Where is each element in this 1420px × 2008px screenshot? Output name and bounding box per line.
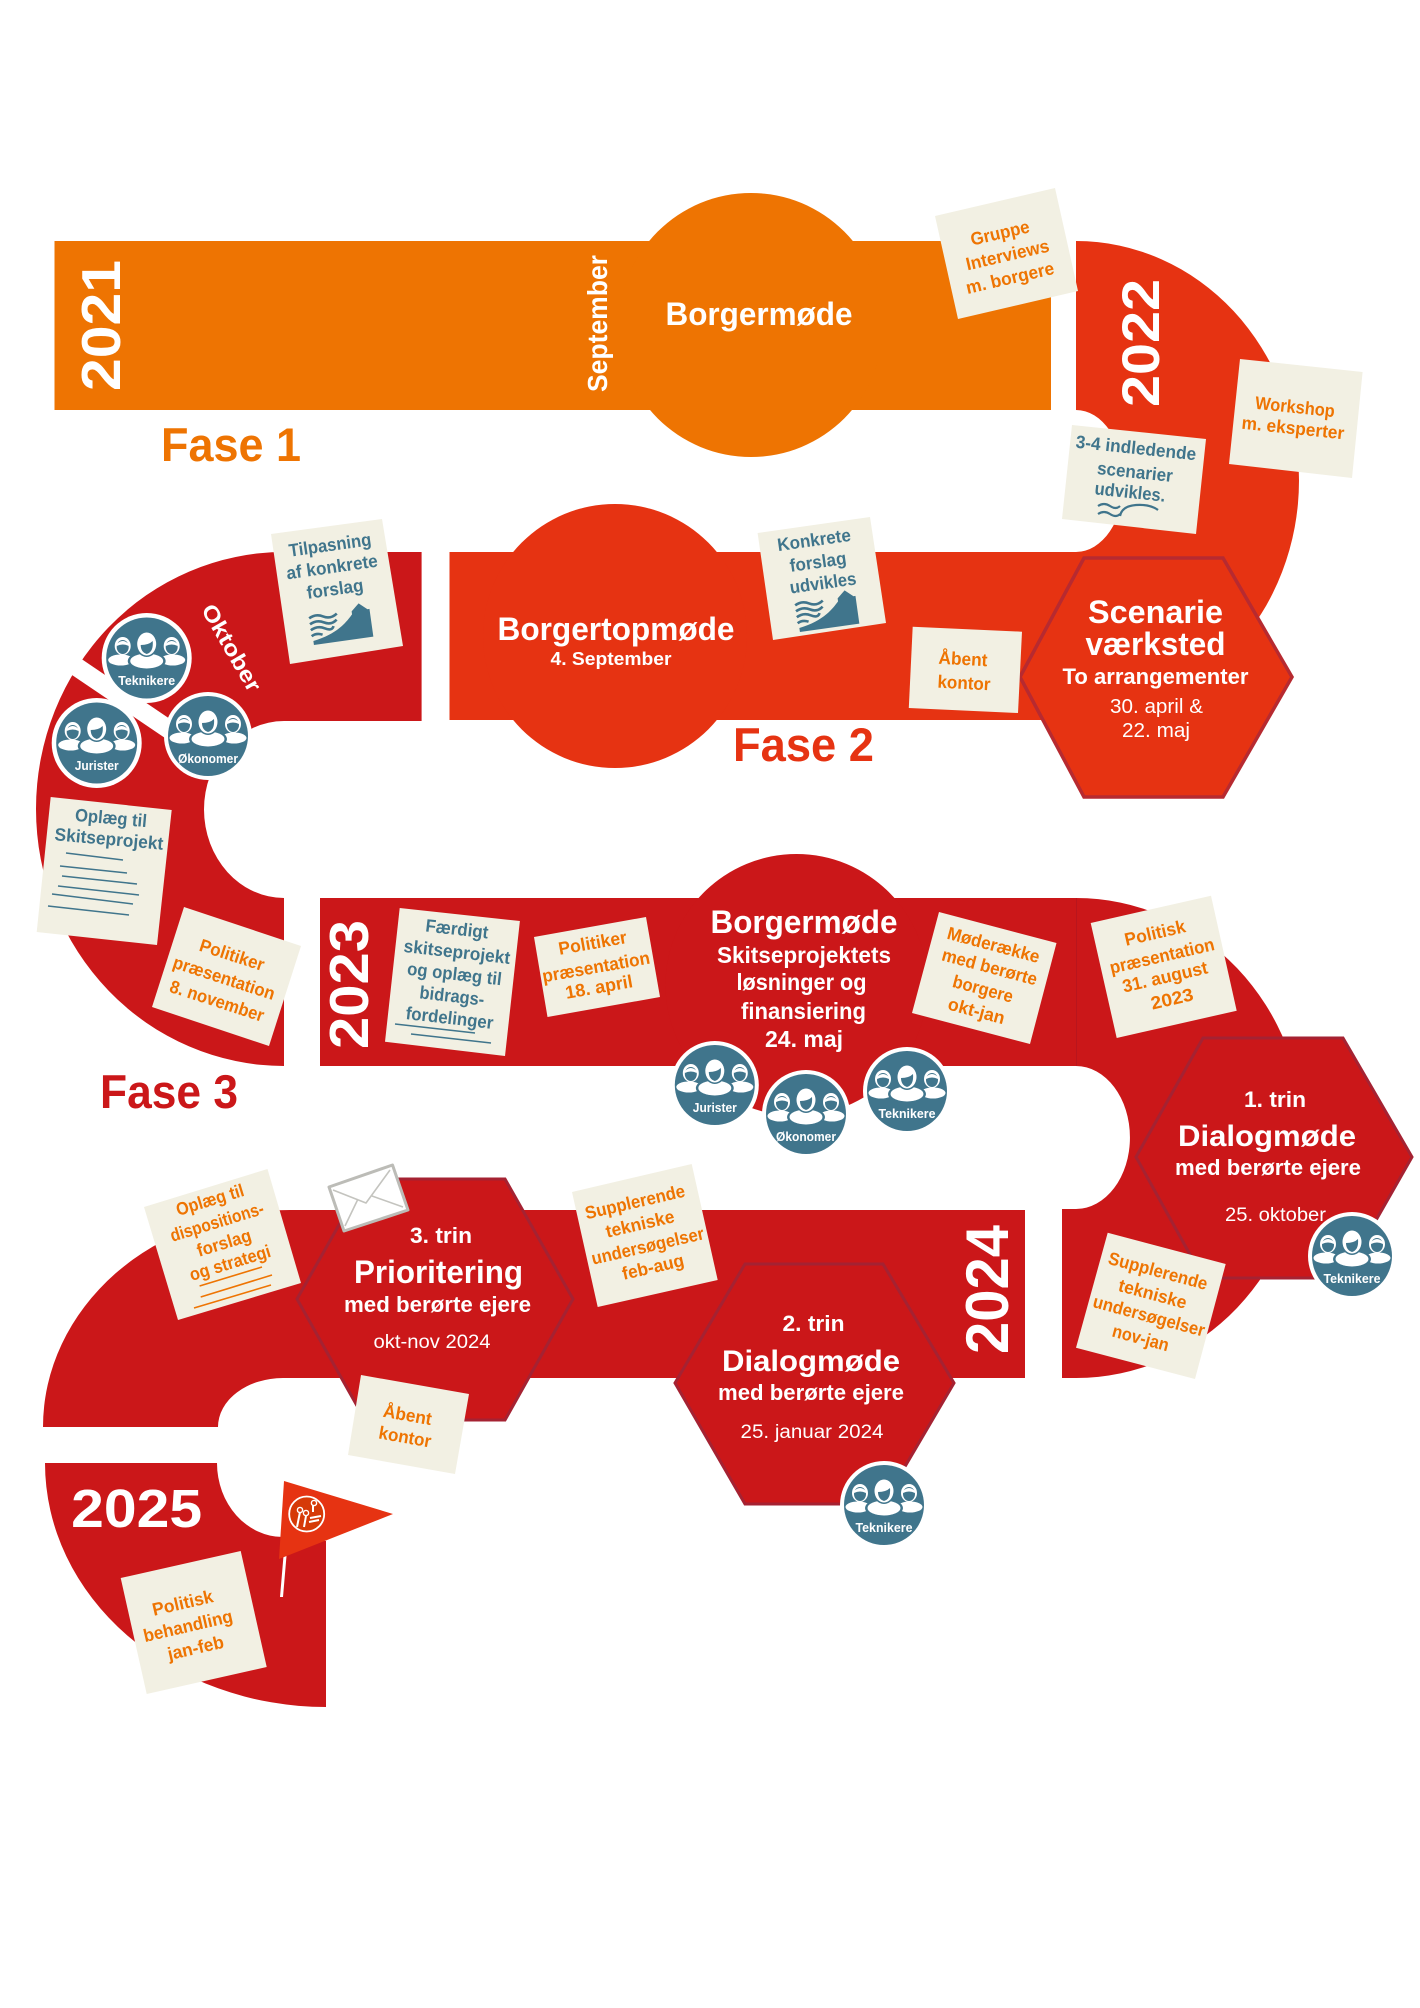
note: Færdigt skitseprojekt: bidrags- <box>419 982 485 1010</box>
icon: underlines <box>395 1024 491 1043</box>
person badge: Teknikere (1. trin): Teknikere <box>1324 1271 1380 1286</box>
note: Workshop: m. eksperter <box>1241 413 1345 443</box>
year 2023: 2023 <box>318 920 380 1049</box>
hexagon: 3. trin Prioritering: Prioritering <box>354 1254 523 1290</box>
hexagon: Scenarie værksted <box>1020 558 1292 797</box>
note: Supplerende tekniske undersøgelser feb-aug: Supplerende <box>583 1181 687 1223</box>
hexagon: 2. trin Dialogmøde: 2. trin <box>782 1311 844 1336</box>
note: Supplerende tekniske undersøgelser nov-jan: nov-jan <box>1110 1321 1171 1355</box>
heading Borgertopmøde: Borgertopmøde <box>498 611 734 647</box>
note: Oplæg til dispositionsforslag og strategi: forslag <box>194 1225 254 1261</box>
note: Oplæg til Skitseprojekt: Skitseprojekt <box>54 824 164 854</box>
note: Åbent kontor upper: Åbent <box>938 648 988 670</box>
note: Møderække med berørte borgere: borgere <box>950 971 1016 1007</box>
note: Åbent kontor upper: kontor <box>937 672 991 694</box>
note: Politiker præsentation 18. april: præsentation <box>541 948 651 986</box>
note: Supplerende tekniske undersøgelser feb-aug: undersøgelser <box>589 1223 706 1269</box>
heading Borgermøde 24. maj <box>710 904 898 1052</box>
note: Supplerende tekniske undersøgelser feb-aug: feb-aug <box>620 1250 686 1284</box>
hexagon: 3. trin Prioritering: med berørte ejere <box>344 1292 531 1317</box>
icon: text lines <box>48 853 139 915</box>
panel: 2023 band with Borgermøde <box>318 854 1304 1378</box>
note: 3-4 indledende scenarier: 3-4 indledende <box>1075 432 1197 464</box>
heading Borgermøde: Borgermøde <box>666 296 852 332</box>
person badge: Økonomer (2023): Økonomer <box>776 1129 836 1144</box>
note: Konkrete forslag udvikles: forslag <box>788 548 848 576</box>
note: Gruppe Interviews: Gruppe <box>969 217 1031 249</box>
hexagon: 2. trin Dialogmøde: med berørte ejere <box>718 1380 904 1405</box>
panel: 2021 orange band with Borgermøde <box>54 193 1051 457</box>
note: Politiker præsentation 18. april <box>534 917 660 1017</box>
note: Supplerende tekniske undersøgelser feb-aug <box>572 1164 718 1307</box>
note: Gruppe Interviews: m. borgere <box>964 258 1056 298</box>
note: Færdigt skitseprojekt: fordelinger <box>405 1003 494 1033</box>
hexagon: 3. trin Prioritering: okt-nov 2024 <box>374 1332 491 1353</box>
year 2025: 2025 <box>71 1479 202 1539</box>
person badge: Økonomer (2023) <box>762 1070 850 1158</box>
note: Tilpasning af konkrete forslag: forslag <box>305 575 365 603</box>
icon: orange underlines <box>194 1267 272 1308</box>
note: Færdigt skitseprojekt: og oplæg til <box>406 959 503 989</box>
note: Oplæg til dispositionsforslag og strategi <box>144 1169 301 1320</box>
hexagon: 1. trin Dialogmøde <box>1136 1038 1412 1278</box>
person badge: Teknikere (2. trin) <box>840 1461 928 1549</box>
month September: September <box>582 255 613 392</box>
note: Møderække med berørte borgere: med berørte <box>940 945 1040 989</box>
note: Supplerende tekniske undersøgelser nov-jan: tekniske <box>1116 1275 1189 1313</box>
person badge: Økonomer (Oktober): Økonomer <box>178 751 238 766</box>
note: Politiker præsentation 18. april: 18. april <box>564 971 634 1003</box>
note: Supplerende tekniske undersøgelser feb-aug: tekniske <box>604 1206 676 1242</box>
hexagon: 1. trin Dialogmøde: Dialogmøde <box>1178 1120 1356 1153</box>
note: Færdigt skitseprojekt: skitseprojekt <box>403 936 511 968</box>
note: Oplæg til Skitseprojekt <box>37 797 172 945</box>
hexagon: 1. trin Dialogmøde: 25. oktober <box>1225 1205 1327 1226</box>
heading Fase 2: Fase 2 <box>733 718 874 771</box>
heading Borgermøde 24. maj: Skitseprojektets <box>717 942 891 968</box>
icon: coast slope <box>308 602 373 645</box>
hexagon: Scenarie værksted: 22. maj <box>1122 720 1190 742</box>
heading Borgermøde 24. maj: finansiering <box>741 998 866 1024</box>
note: Politisk behandling jan-feb: Politisk <box>150 1586 216 1620</box>
note: Politisk præsentation 31. august 2023: 2023 <box>1149 984 1195 1014</box>
heading Fase 1: Fase 1 <box>161 418 301 471</box>
heading Borgermøde 24. maj: løsninger og <box>736 969 866 995</box>
icon: waves <box>1098 504 1158 516</box>
note: Færdigt skitseprojekt: Færdigt <box>425 915 489 943</box>
person badge: Teknikere (1. trin) <box>1308 1212 1396 1300</box>
person badge: Teknikere (2023): Teknikere <box>878 1106 936 1121</box>
panel: 2022 band with Borgertopmøde <box>450 241 1299 768</box>
note: Oplæg til Skitseprojekt: Oplæg til <box>74 805 148 831</box>
hexagon: 1. trin Dialogmøde: 1. trin <box>1244 1087 1306 1112</box>
note: Møderække med berørte borgere: Møderække <box>945 923 1042 967</box>
note: Politiker præsentation 8. november <box>152 907 301 1046</box>
panel: Oktober curve to 2023 <box>36 552 422 1066</box>
note: Oplæg til dispositionsforslag og strategi: Oplæg til <box>174 1180 246 1220</box>
panel: 2025 end segment <box>45 1463 326 1707</box>
note: Oplæg til dispositionsforslag og strategi: og strategi <box>187 1241 273 1285</box>
note: Supplerende tekniske undersøgelser nov-jan: Supplerende <box>1106 1248 1210 1294</box>
icon: coast slope <box>794 589 859 632</box>
note: Gruppe Interviews: Interviews <box>964 236 1051 274</box>
note: Politisk behandling jan-feb: jan-feb <box>165 1632 226 1664</box>
person badge: Teknikere (Oktober): Teknikere <box>118 673 175 688</box>
hexagon: Scenarie værksted: Scenarie <box>1088 594 1223 630</box>
note: Åbent kontor lower <box>348 1375 469 1474</box>
person badge: Jurister (Oktober): Jurister <box>75 758 119 773</box>
note: Politisk præsentation 31. august 2023: præsentation <box>1108 934 1216 978</box>
heading Borgermøde 24. maj: Borgermøde <box>710 904 898 940</box>
note: Tilpasning af konkrete forslag: Tilpasning <box>288 529 372 561</box>
note: Møderække med berørte borgere <box>912 912 1056 1044</box>
note: Politisk behandling jan-feb: behandling <box>141 1606 235 1646</box>
hexagon: Scenarie værksted: værksted <box>1086 626 1226 662</box>
hexagon: Scenarie værksted: 30. april & <box>1110 696 1204 718</box>
note: Supplerende tekniske undersøgelser nov-jan: undersøgelser <box>1091 1291 1207 1341</box>
person badge: Jurister (Oktober) <box>52 698 142 788</box>
note: Åbent kontor lower: Åbent <box>382 1401 433 1429</box>
hexagon: Scenarie værksted: To arrangementer <box>1062 664 1249 689</box>
heading Borgermøde 24. maj: 24. maj <box>765 1026 843 1052</box>
note: Åbent kontor lower: kontor <box>377 1423 433 1451</box>
hexagon: 2. trin Dialogmøde: Dialogmøde <box>722 1345 900 1378</box>
note: Politiker præsentation 8. november: Politiker <box>197 935 267 975</box>
date 4. September: 4. September <box>550 649 672 669</box>
note: Åbent kontor upper <box>909 627 1022 713</box>
icon: envelope <box>329 1165 408 1231</box>
note: Workshop <box>1229 359 1363 478</box>
note: Færdigt skitseprojekt <box>385 908 520 1056</box>
note: Møderække med berørte borgere: okt-jan <box>946 994 1007 1028</box>
hexagon: 3. trin Prioritering: 3. trin <box>410 1223 472 1248</box>
note: Oplæg til dispositionsforslag og strategi: dispositions- <box>168 1198 266 1246</box>
heading Fase 3: Fase 3 <box>100 1065 238 1118</box>
note: Konkrete forslag udvikles: Konkrete <box>776 525 852 555</box>
icon: flag with pole <box>279 1481 393 1597</box>
note: Gruppe Interviews <box>935 188 1078 319</box>
note: Tilpasning af konkrete forslag <box>271 519 403 664</box>
year 2022: 2022 <box>1112 279 1171 407</box>
panel: 2024 band <box>43 1210 1025 1427</box>
note: Politisk præsentation 31. august 2023: Politisk <box>1123 916 1188 950</box>
note: Konkrete forslag udvikles: udvikles <box>788 568 858 598</box>
note: Politiker præsentation 8. november: 8. november <box>167 976 267 1026</box>
hexagon: 2. trin Dialogmøde: 25. januar 2024 <box>740 1422 884 1443</box>
note: Tilpasning af konkrete forslag: af konkrete <box>285 551 379 583</box>
note: Konkrete forslag udvikles <box>758 517 886 640</box>
note: Politiker præsentation 8. november: præsentation <box>171 952 277 1004</box>
person badge: Jurister (2023): Jurister <box>693 1100 737 1115</box>
note: Politisk behandling jan-feb <box>121 1551 267 1694</box>
note: Politisk præsentation 31. august 2023 <box>1091 896 1237 1038</box>
person badge: Økonomer (Oktober) <box>164 692 252 780</box>
note: Workshop: Workshop <box>1254 393 1336 421</box>
hexagon: 2. trin Dialogmøde <box>675 1264 954 1504</box>
hexagon: 1. trin Dialogmøde: med berørte ejere <box>1175 1155 1361 1180</box>
year 2021: 2021 <box>70 260 132 391</box>
note: Politiker præsentation 18. april: Politiker <box>557 927 628 959</box>
note: Supplerende tekniske undersøgelser nov-jan <box>1076 1233 1226 1379</box>
note: 3-4 indledende scenarier: udvikles. <box>1094 478 1166 506</box>
note: 3-4 indledende scenarier: scenarier <box>1096 458 1174 486</box>
person badge: Teknikere (2023) <box>863 1047 951 1135</box>
note: 3-4 indledende scenarier <box>1062 425 1206 534</box>
note: Politisk præsentation 31. august 2023: 31. august <box>1120 957 1210 997</box>
person badge: Teknikere (2. trin): Teknikere <box>856 1520 912 1535</box>
person badge: Jurister (2023) <box>671 1041 759 1129</box>
month Oktober: Oktober <box>196 599 267 696</box>
hexagon: 3. trin Prioritering <box>297 1179 573 1420</box>
year 2024: 2024 <box>954 1224 1021 1354</box>
person badge: Teknikere (Oktober) <box>102 613 192 703</box>
